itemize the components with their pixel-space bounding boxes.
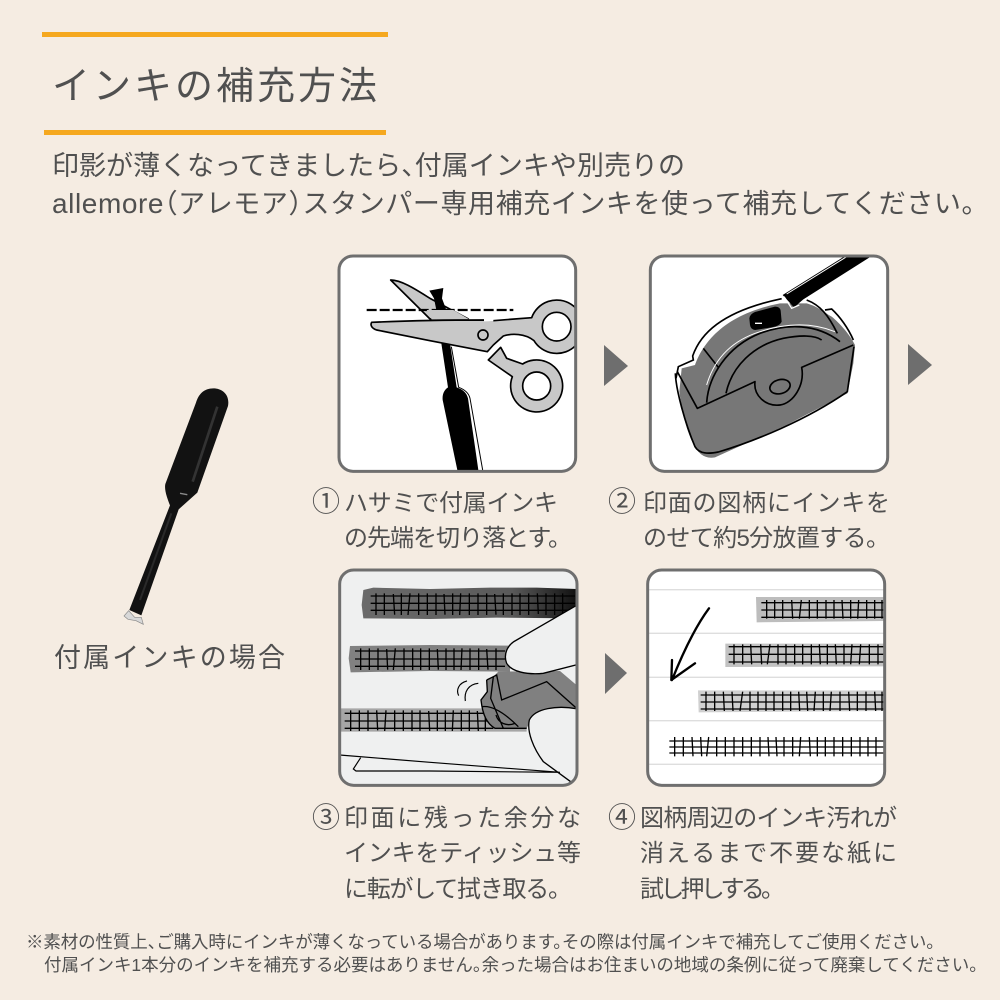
stamp in hand (481, 671, 578, 728)
ink tube (429, 288, 446, 310)
main scissors blade (371, 300, 583, 353)
caption 4: 図柄周辺のインキ汚れが (640, 805, 897, 832)
arrow 1 (604, 345, 628, 386)
caption 3: に転がして拭き取る。 (344, 876, 572, 903)
caption 1: ① (312, 486, 340, 517)
caption 4: 消えるまで不要な紙に (640, 840, 897, 867)
caption 3 (312, 802, 581, 903)
included ink label: 付属インキの場合 (54, 643, 285, 673)
caption 4: 試し押しする。 (640, 876, 785, 903)
hand drawn arrow (671, 608, 709, 680)
ink hole (749, 307, 782, 330)
stamp body fill (679, 303, 855, 458)
tissue (340, 755, 560, 772)
caption 3: 印面に残った余分な (344, 805, 581, 832)
caption 2: ② (608, 486, 636, 517)
dashed cut line (366, 308, 514, 312)
panel 3: roll on tissue (340, 570, 578, 788)
caption 2: 印面の図柄にインキを (643, 490, 890, 517)
ink bar 2 (349, 645, 510, 672)
intro text: 印影が薄くなってきましたら、付属インキや別売りの (52, 151, 685, 181)
caption 3: インキをティッシュ等 (344, 840, 581, 867)
caption 1 (312, 486, 572, 552)
arrow 3 (605, 653, 627, 694)
ink bars (756, 597, 885, 622)
caption 1: の先端を切り落とす。 (344, 525, 572, 552)
back blade (391, 280, 468, 319)
ink bar 1 (362, 588, 577, 619)
stamp outlines (676, 299, 782, 378)
intro text (52, 151, 975, 219)
intro text: allemore（アレモア）スタンパー専用補充インキを使って補充してください。 (52, 188, 975, 219)
title block (42, 32, 388, 135)
footnote (26, 932, 978, 975)
second handle (488, 347, 563, 412)
panel 2: put ink on stamp face (650, 255, 888, 471)
footnote: ※素材の性質上、ご購入時にインキが薄くなっている場合があります。その際は付属インキで補充してご使用ください。 (26, 932, 935, 952)
caption 4: ④ (608, 802, 636, 833)
included ink tube illustration (124, 388, 228, 624)
footnote: 付属インキ1本分のインキを補充する必要はありません。余った場合はお住まいの地域の条例に従って廃棄してください。 (44, 955, 978, 975)
panel 1: cut tip with scissors (339, 256, 583, 471)
heading: インキの補充方法 (52, 66, 377, 108)
ink bar 3 (340, 708, 527, 732)
motion marks (458, 681, 478, 701)
caption 2: のせて約5分放置する。 (643, 525, 890, 552)
caption 1: ハサミで付属インキ (344, 490, 558, 517)
caption 4 (608, 802, 897, 903)
caption 2 (608, 486, 890, 552)
grid lines (761, 600, 885, 619)
ink nozzle (783, 255, 873, 307)
arrow 2 (908, 344, 932, 385)
grid lines (371, 593, 575, 615)
panel 4: test stamp on paper (648, 570, 885, 785)
fingers (505, 604, 578, 674)
caption 3: ③ (312, 802, 340, 833)
